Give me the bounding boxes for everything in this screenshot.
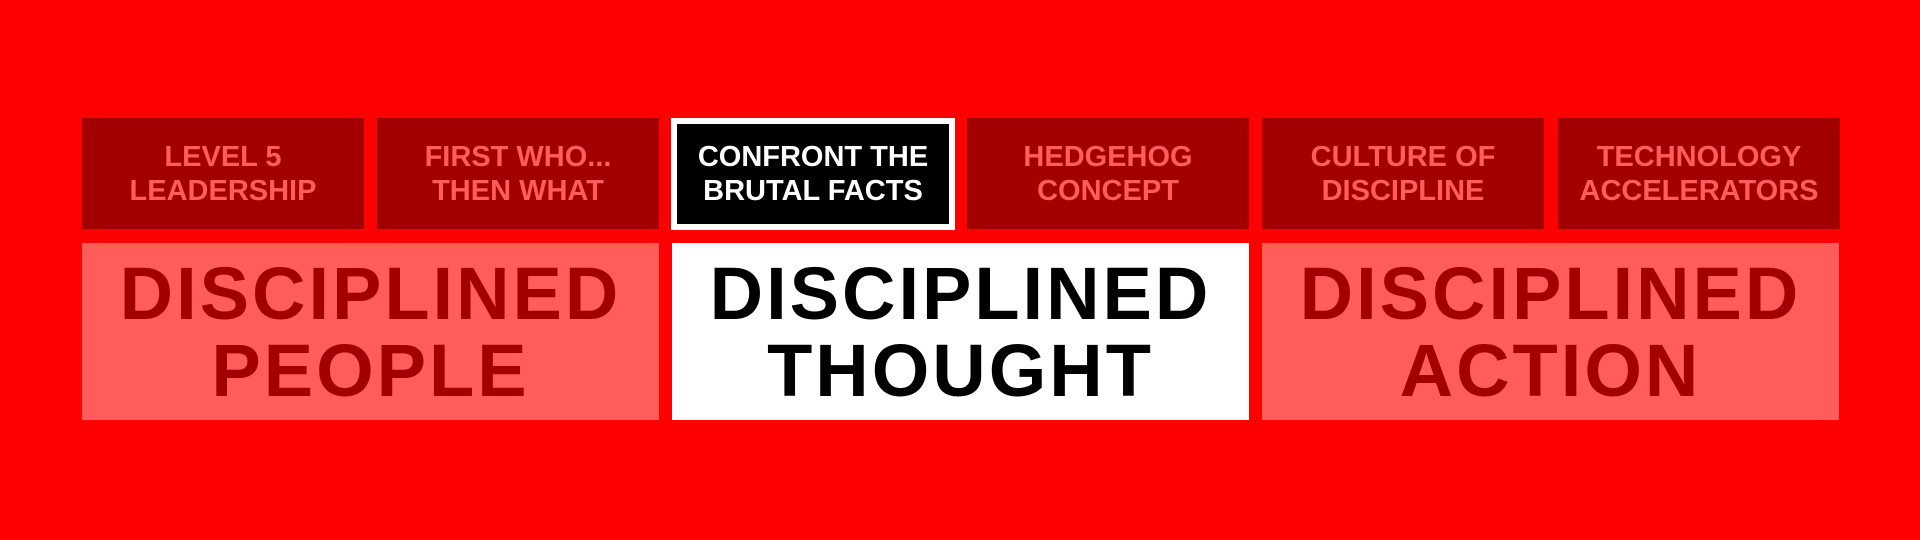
label: hedgehog concept: HEDGEHOG: [1023, 140, 1193, 172]
label: technology accelerators: TECHNOLOGY: [1597, 140, 1801, 172]
panel: disciplined action: ACTION: [1400, 328, 1701, 412]
panel: disciplined people: PEOPLE: [211, 328, 530, 412]
label: technology accelerators: [1558, 118, 1840, 229]
label: first who then what: FIRST WHO...: [425, 140, 611, 172]
panel: disciplined thought: DISCIPLINED: [710, 252, 1211, 334]
label: technology accelerators: ACCELERATORS: [1580, 174, 1818, 206]
label: culture of discipline: DISCIPLINE: [1322, 174, 1484, 206]
label: level 5 leadership: LEADERSHIP: [130, 174, 316, 206]
label: confront the brutal facts (highlighted): [671, 118, 955, 230]
label: level 5 leadership: LEVEL 5: [164, 140, 282, 172]
label: level 5 leadership: [82, 118, 364, 229]
label: culture of discipline: [1262, 118, 1544, 229]
label: first who then what: THEN WHAT: [432, 174, 604, 206]
label: hedgehog concept: [967, 118, 1249, 229]
panel: disciplined people: DISCIPLINED: [120, 252, 621, 334]
panel: disciplined people: [82, 243, 659, 420]
panel: disciplined action: [1262, 243, 1839, 420]
label: first who then what: [377, 118, 659, 229]
label: culture of discipline: CULTURE OF: [1311, 140, 1495, 172]
panel: disciplined action: DISCIPLINED: [1300, 252, 1801, 334]
label: confront the brutal facts (highlighted): BRUTAL FACTS: [703, 175, 923, 207]
panel: disciplined thought: THOUGHT: [767, 328, 1154, 412]
label: hedgehog concept: CONCEPT: [1037, 174, 1179, 206]
label: confront the brutal facts (highlighted): CONFRONT THE: [698, 141, 928, 173]
panel: disciplined thought: [672, 243, 1249, 420]
